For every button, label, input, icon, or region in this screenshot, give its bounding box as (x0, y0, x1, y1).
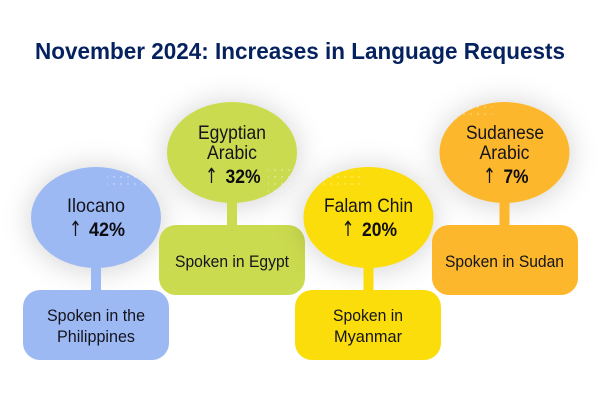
ellipse shadow: Ilocano (28, 165, 164, 273)
language name: Sudanese Arabic (466, 122, 544, 164)
dot pattern: Egyptian Arabic (268, 167, 290, 200)
increase: Sudanese Arabic: 7% (504, 166, 528, 188)
language name: Egyptian Arabic: Egyptian (198, 122, 266, 144)
group: Falam Chin (295, 165, 441, 360)
location: Falam Chin: Spoken in (333, 307, 403, 325)
location: Falam Chin: Myanmar (334, 328, 402, 346)
ellipse shadow: Egyptian Arabic (164, 100, 300, 208)
increase: Egyptian Arabic: ↑ (205, 164, 218, 188)
language name: Falam Chin: Falam Chin (324, 195, 413, 217)
increase: Egyptian Arabic (205, 164, 260, 188)
language name: Sudanese Arabic: Sudanese (466, 122, 544, 144)
increase: Ilocano (69, 217, 125, 241)
ellipse: Sudanese Arabic (440, 102, 570, 203)
increase: Sudanese Arabic: ↑ (483, 164, 496, 188)
ellipse shadow: Falam Chin (300, 165, 436, 273)
location: Ilocano: Philippines (57, 328, 135, 346)
ellipse shadow: Sudanese Arabic (436, 100, 572, 208)
location: Ilocano: Spoken in the (47, 307, 145, 325)
language name: Egyptian Arabic (198, 122, 266, 164)
group: Ilocano (23, 165, 169, 360)
increase: Sudanese Arabic (483, 164, 528, 188)
stem: Falam Chin (364, 262, 374, 294)
location: Ilocano (47, 307, 145, 346)
location: Sudanese Arabic: Spoken in Sudan (445, 253, 564, 271)
dot pattern: Ilocano (107, 172, 142, 188)
group: Egyptian Arabic (159, 100, 305, 295)
box: Egyptian Arabic (159, 225, 305, 295)
box: Ilocano (23, 290, 169, 360)
ellipse: Ilocano (31, 167, 161, 268)
ellipse: Egyptian Arabic (167, 102, 297, 203)
stem: Ilocano (91, 262, 101, 294)
increase: Falam Chin (342, 217, 397, 241)
location: Falam Chin (333, 307, 403, 346)
ellipse: Falam Chin (304, 167, 434, 268)
title: November 2024: Increases in Language Requests (35, 38, 565, 64)
language name: Egyptian Arabic: Arabic (207, 142, 257, 164)
box: Falam Chin (295, 290, 441, 360)
stem: Egyptian Arabic (227, 197, 237, 229)
location: Egyptian Arabic: Spoken in Egypt (175, 253, 289, 271)
increase: Ilocano: ↑ (69, 217, 82, 241)
stem: Sudanese Arabic (500, 197, 510, 229)
dot pattern: Falam Chin (322, 170, 364, 187)
box: Sudanese Arabic (432, 225, 578, 295)
group: Sudanese Arabic (432, 100, 578, 295)
increase: Falam Chin: ↑ (342, 217, 354, 241)
language name: Sudanese Arabic: Arabic (480, 142, 530, 164)
dot pattern: Sudanese Arabic (450, 105, 492, 119)
increase: Ilocano: 42% (89, 219, 125, 241)
language name: Ilocano: Ilocano (67, 195, 125, 217)
increase: Egyptian Arabic: 32% (226, 166, 260, 188)
increase: Falam Chin: 20% (362, 219, 397, 241)
